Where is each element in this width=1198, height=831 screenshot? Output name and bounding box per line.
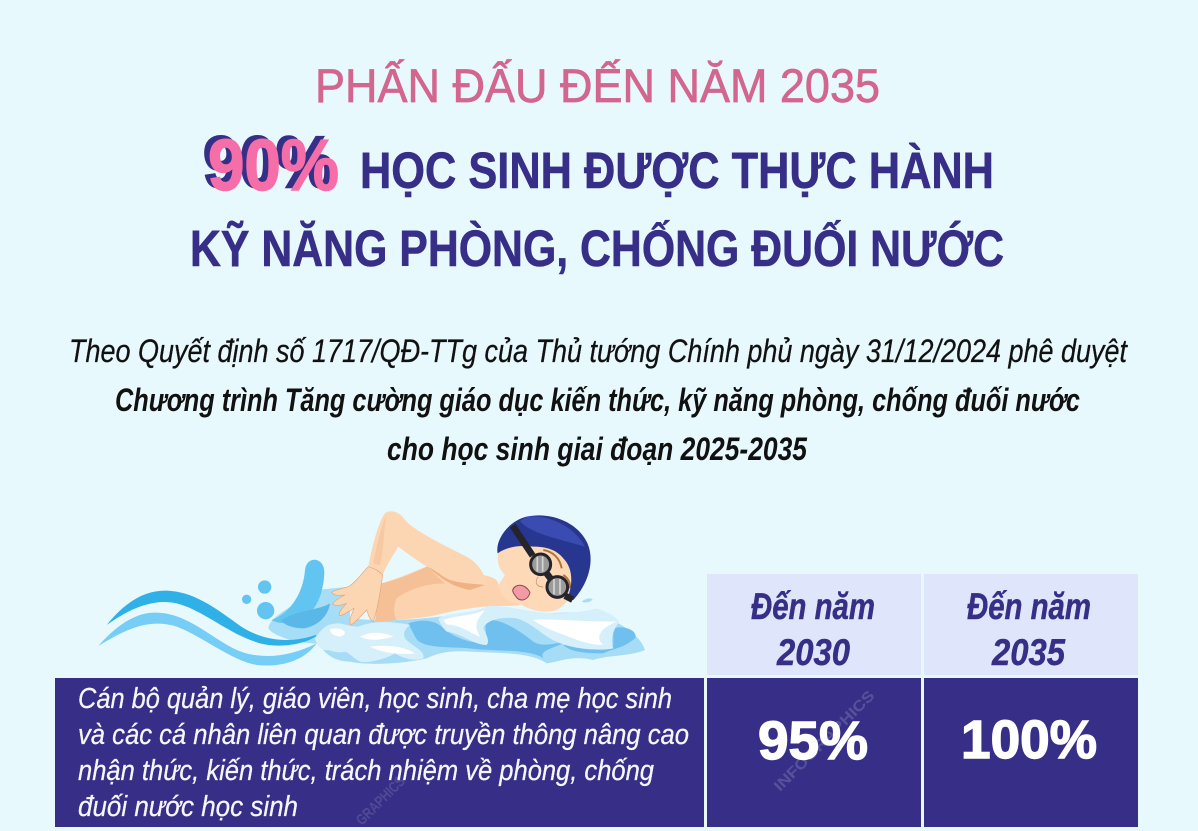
goggles bbox=[513, 526, 573, 600]
table header: 2035: 2035 bbox=[991, 632, 1066, 673]
table header: 2030: Đến năm bbox=[751, 586, 875, 627]
table row: description: và các cá nhân liên quan được truyền thông nâng cao bbox=[78, 719, 689, 751]
water: light bbox=[315, 612, 645, 664]
table row: description bbox=[55, 678, 704, 829]
intro text block bbox=[69, 333, 1128, 467]
eyebrows bbox=[543, 550, 570, 588]
illustration: swimmer bbox=[98, 511, 645, 665]
wave: lower bbox=[98, 613, 317, 665]
table row: description: đuối nước học sinh bbox=[78, 791, 298, 823]
title: 90% highlight: 90% bbox=[208, 126, 339, 206]
table cell: 95%: INFOGRAPHICS bbox=[771, 687, 878, 795]
splash curl bbox=[272, 560, 324, 623]
body and water bbox=[315, 511, 645, 664]
foam: right bbox=[438, 606, 619, 650]
table header: 2035: Đến năm bbox=[967, 586, 1091, 627]
table cell: 100% bbox=[924, 678, 1138, 827]
table cell: 95%: 95% bbox=[758, 711, 868, 771]
table header: 2030 bbox=[707, 574, 921, 675]
bubbles bbox=[242, 580, 274, 619]
table cell: 95% bbox=[707, 678, 921, 827]
splash behind hand bbox=[268, 587, 350, 644]
nose bbox=[536, 577, 543, 587]
title: line two: HỌC SINH ĐƯỢC THỰC HÀNH bbox=[360, 142, 994, 199]
mouth bbox=[513, 585, 530, 600]
table header: 2035 bbox=[924, 574, 1138, 675]
intro text block: cho học sinh giai đoạn 2025-2035 bbox=[387, 431, 808, 467]
table row: description: nhận thức, kiến thức, trách nhiệm về phòng, chống bbox=[78, 755, 654, 787]
table row: description: Cán bộ quản lý, giáo viên, học sinh, cha mẹ học sinh bbox=[78, 683, 672, 715]
title: 90% highlight: 90% bbox=[203, 123, 334, 203]
near arm bbox=[368, 511, 487, 590]
wave: upper bbox=[107, 591, 320, 646]
table row: description: GRAPHICS bbox=[353, 773, 409, 829]
table header: 2030: 2030 bbox=[776, 632, 850, 673]
hand bbox=[332, 567, 383, 625]
swim cap bbox=[497, 515, 591, 600]
waves and bubbles bbox=[98, 560, 350, 665]
title: goal year: PHẤN ĐẤU ĐẾN NĂM 2035 bbox=[315, 59, 880, 112]
torso bbox=[375, 564, 520, 622]
water: deep bbox=[408, 620, 563, 658]
title: line three: KỸ NĂNG PHÒNG, CHỐNG ĐUỐI NƯỚC bbox=[190, 219, 1004, 277]
foam: left bbox=[315, 622, 424, 662]
droplet bbox=[582, 598, 593, 602]
head bbox=[498, 543, 576, 612]
table cell: 100%: 100% bbox=[961, 710, 1097, 770]
